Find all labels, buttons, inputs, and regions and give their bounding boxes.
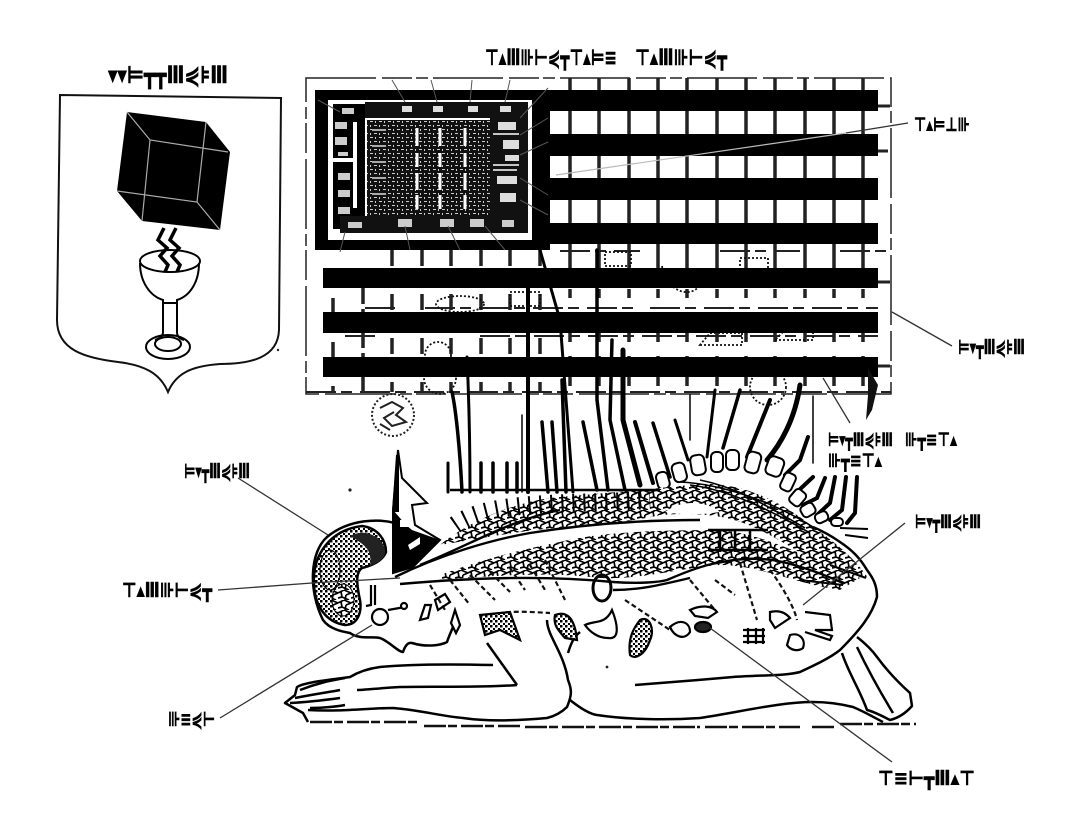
label: lower right multi-line: ⊨▾┳Ⅲ⋞⊧Ⅲ xyxy=(828,429,893,451)
chip bottom pads xyxy=(340,216,528,236)
leader: right middle xyxy=(892,312,952,346)
label: eye: ⊪≡⋞⊢ xyxy=(168,707,215,731)
leader: top right xyxy=(846,123,908,133)
icon: dotted seal below flag xyxy=(372,394,414,436)
leader: abdomen xyxy=(710,628,892,762)
hand fingers xyxy=(290,678,345,708)
spinal cord mesh xyxy=(440,480,868,590)
chip white frame xyxy=(328,100,532,240)
organ: heart xyxy=(585,610,617,638)
organ: throat xyxy=(420,594,460,633)
vertebra ladder xyxy=(455,500,650,525)
shield outline xyxy=(57,95,281,392)
upper mesh band xyxy=(440,484,868,578)
label: lower back: ⊨▾┳Ⅲ⋞⊧Ⅲ xyxy=(915,511,981,533)
body outline xyxy=(285,521,912,722)
label: lower right multi-line xyxy=(828,429,957,472)
flag grid bars top xyxy=(570,78,863,268)
label: lower right multi-line: ⊪┳≡⊤▴ xyxy=(828,450,882,472)
leader: brain center xyxy=(218,578,400,590)
lower mesh band xyxy=(440,530,860,590)
seal marks inside flag xyxy=(424,252,813,405)
organ: eye xyxy=(372,609,388,625)
canton: microchip xyxy=(315,80,550,252)
vertebrae xyxy=(655,450,843,526)
label: brain top: ⊨▾┳Ⅲ⋞⊧Ⅲ xyxy=(184,459,250,484)
icon: goblet xyxy=(140,250,200,359)
chip leader wires xyxy=(318,80,548,252)
flag corner shape xyxy=(866,368,878,420)
leader: eye xyxy=(220,625,372,718)
top spine line xyxy=(450,489,660,491)
label: lower right multi-line: ⊪┳≡⊤▴ xyxy=(905,429,957,451)
flag thin horizontal rules xyxy=(306,251,891,392)
spine nerve trunks xyxy=(395,510,843,601)
specks xyxy=(277,349,608,668)
flag frame xyxy=(306,78,891,394)
ground line xyxy=(310,722,916,727)
label: right middle: ⊨▾┳Ⅲ⋞⊧Ⅲ xyxy=(958,335,1025,360)
panel: flag xyxy=(306,78,891,420)
leader: lower right xyxy=(823,378,850,423)
leader: brain top xyxy=(238,478,328,535)
label: abdomen: ⊤≡⊢┳Ⅲ▴⊤ xyxy=(878,766,975,791)
lower spine nerve ends xyxy=(800,528,868,585)
heading: flag title: ⊤▴Ⅲ⊪⊢⋞┳⊤▴⊨≡ xyxy=(485,46,617,71)
chip right pads xyxy=(490,118,528,222)
label: top right: ⊤▴⊨⊥⊪ xyxy=(914,114,970,136)
icon: black cube xyxy=(117,112,230,230)
brain xyxy=(314,526,386,625)
lumbar ladder xyxy=(708,530,768,552)
panel: coat of arms shield xyxy=(57,95,281,392)
icon: lightning between cube and goblet xyxy=(158,228,180,272)
organs xyxy=(366,585,832,657)
white lens xyxy=(665,503,720,514)
lumbar nerve bundle xyxy=(680,480,813,533)
white leader crossing stripe xyxy=(556,133,846,175)
nerves from flag to spine xyxy=(448,250,857,523)
branch nerves below the spine xyxy=(430,560,797,630)
organ: dark gland xyxy=(695,622,711,632)
canton field xyxy=(315,90,550,250)
chip top pads xyxy=(365,102,528,118)
chip core xyxy=(367,120,490,216)
organ: lung xyxy=(555,614,577,640)
heading: shield title: ▾▾⊨┳┳Ⅲ⋞⊧Ⅲ xyxy=(108,61,228,90)
figure: human body with nervous system xyxy=(285,450,916,727)
organ: kidney xyxy=(670,622,690,637)
heading: flag title: ⊤▴Ⅲ⊪⊢⋞┳ xyxy=(635,46,728,71)
flag stripes xyxy=(323,90,878,377)
label: brain center: ⊤▴Ⅲ⊪⊢⋞┳ xyxy=(122,578,213,603)
organ: liver xyxy=(629,619,652,657)
flag grid bars lower xyxy=(333,250,863,392)
chip left pads xyxy=(333,104,365,229)
stripe end ticks xyxy=(878,106,890,366)
neck spike and dark brainstem xyxy=(392,450,440,573)
organ: bladder xyxy=(787,634,804,650)
organ: bowel xyxy=(743,628,765,644)
leader: lower back xyxy=(803,523,905,605)
